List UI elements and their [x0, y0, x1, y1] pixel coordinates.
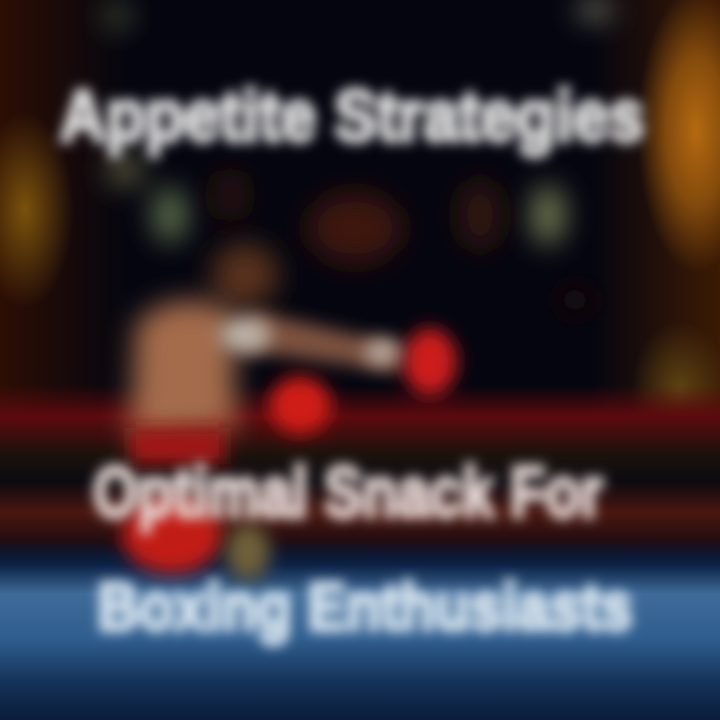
- boxer: arm: [240, 310, 400, 372]
- boxer: red glove left: [269, 376, 331, 434]
- boxer: boot: [226, 524, 270, 580]
- boxer: torso: [130, 300, 235, 440]
- title: top line: Appetite Strategies: [60, 76, 644, 157]
- boxer: waistband: [130, 428, 225, 464]
- boxer: head: [211, 243, 279, 307]
- background: arena lights: [0, 0, 720, 460]
- boxing ring ropes: [0, 385, 720, 560]
- ring floor: [0, 540, 720, 720]
- boxer: wrist tape: [364, 339, 400, 365]
- title: third line: Boxing Enthusiasts: [98, 569, 632, 645]
- boxer: hand wrap: [219, 317, 271, 353]
- boxer figure: [122, 243, 457, 580]
- title: second line: Optimal Snack For: [93, 453, 603, 533]
- boxer: red glove right: [403, 328, 457, 396]
- boxer: shorts: [122, 497, 222, 573]
- background: scoreboard glow: [214, 169, 591, 314]
